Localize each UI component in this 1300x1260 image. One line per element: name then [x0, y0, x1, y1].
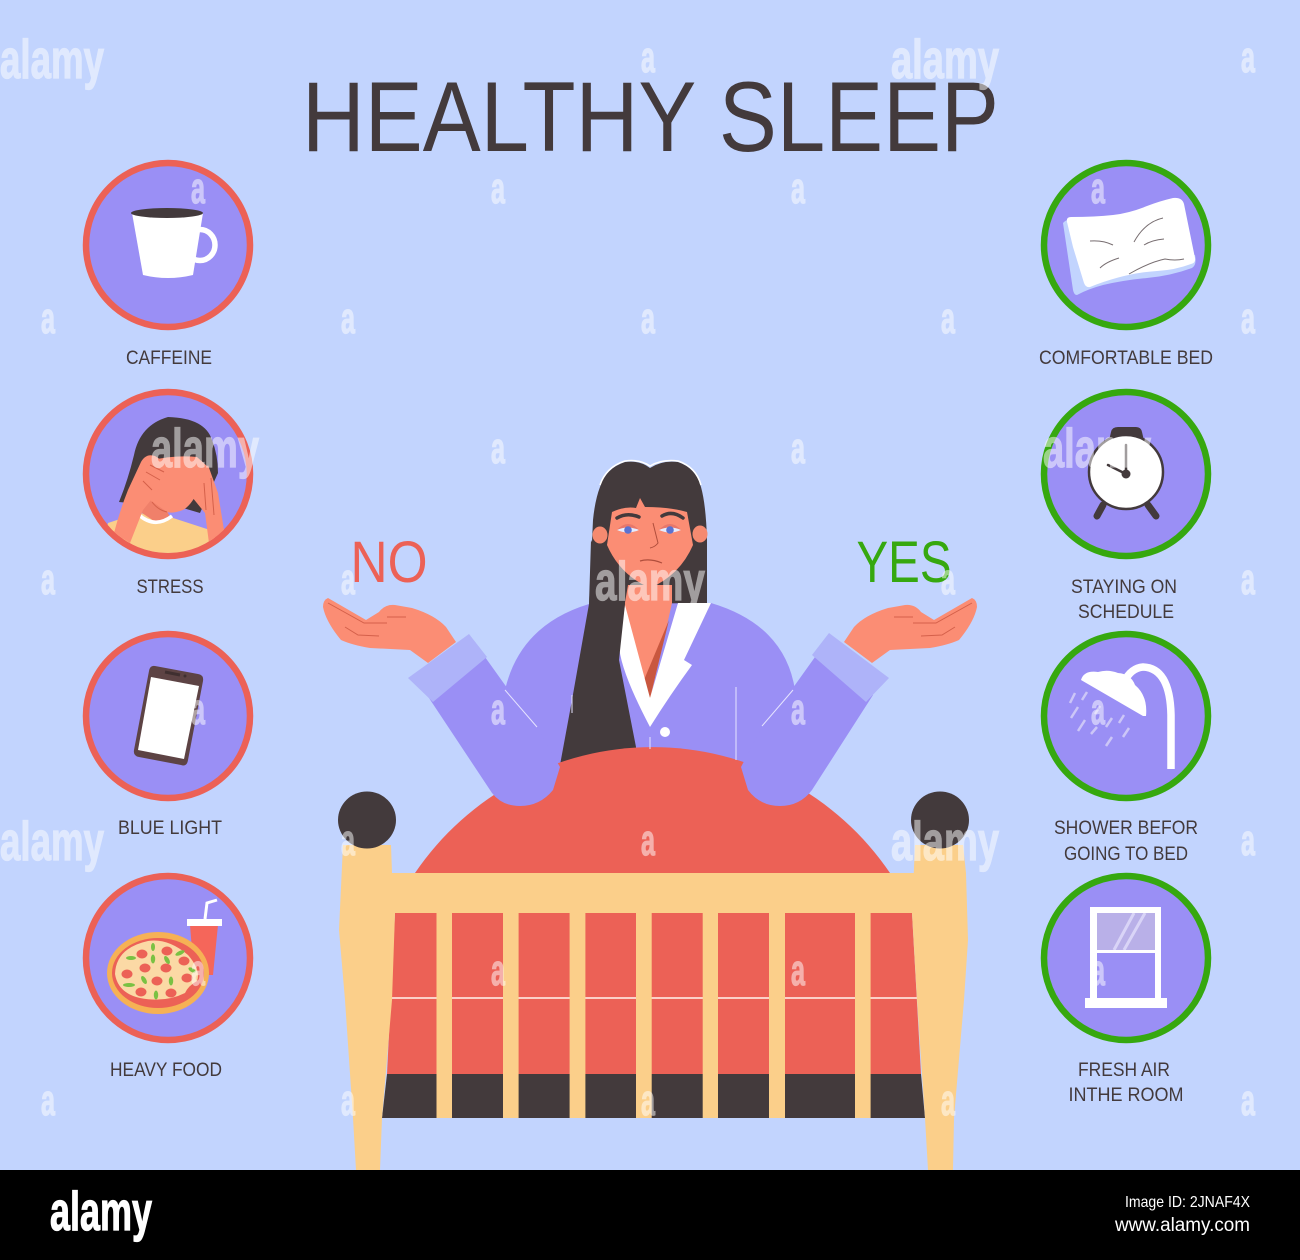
face [592, 498, 708, 588]
watermarks: a [1241, 816, 1255, 865]
watermarks: a [191, 685, 205, 734]
watermarks: a [641, 33, 655, 82]
label: shower before going to bed: GOING TO BED [1064, 844, 1188, 865]
label: shower before going to bed [1054, 818, 1198, 865]
watermarks: a [1241, 1076, 1255, 1125]
watermarks: a [1241, 294, 1255, 343]
watermarks: a [341, 294, 355, 343]
watermarks: a [791, 164, 805, 213]
watermarks: a [41, 294, 55, 343]
label: caffeine: CAFFEINE [126, 348, 212, 369]
icon: pillow [1044, 163, 1208, 327]
hair strand [560, 540, 636, 765]
label: staying on schedule: STAYING ON [1071, 577, 1177, 598]
left bed post [339, 845, 395, 1170]
icon: stressed woman [86, 392, 250, 560]
icon: shower [1044, 634, 1208, 798]
label: comfortable bed: COMFORTABLE BED [1039, 348, 1213, 369]
watermarks: a [1241, 555, 1255, 604]
label: staying on schedule [1071, 577, 1177, 623]
watermarks: alamy [0, 28, 104, 90]
label: blue light: BLUE LIGHT [118, 818, 222, 839]
watermarks: a [641, 816, 655, 865]
watermarks: a [491, 685, 505, 734]
watermarks: alamy [595, 550, 705, 612]
watermarks: a [941, 1076, 955, 1125]
watermarks: a [41, 1076, 55, 1125]
label: shower before going to bed: SHOWER BEFOR [1054, 818, 1198, 839]
icon: phone blue light [86, 634, 250, 798]
watermarks: a [791, 946, 805, 995]
watermarks: alamy [891, 28, 999, 90]
panel: no column [86, 163, 250, 1081]
jacket button [660, 727, 670, 737]
left hand and cuff [323, 598, 487, 702]
right arm [741, 650, 873, 806]
NO label: NO [350, 530, 428, 595]
icon: alarm clock [1044, 392, 1208, 556]
left arm [427, 650, 560, 806]
watermarks: a [191, 164, 205, 213]
icon: pizza and soda [86, 876, 250, 1040]
neck and chest [622, 585, 672, 700]
jacket collar [619, 603, 711, 727]
woman figure [323, 461, 977, 873]
right knob [911, 792, 969, 848]
watermarks: a [641, 294, 655, 343]
top rail [391, 873, 917, 913]
bottom black band [0, 1170, 1300, 1260]
YES label: YES [856, 530, 952, 595]
label: stress: STRESS [136, 577, 204, 598]
watermarks: a [1091, 164, 1105, 213]
watermarks: a [491, 946, 505, 995]
right hand and cuff [812, 598, 977, 702]
watermarks: a [641, 1076, 655, 1125]
blanket [415, 747, 890, 873]
slats [436, 913, 871, 1118]
watermarks: a [1241, 33, 1255, 82]
watermarks: a [791, 424, 805, 473]
label: heavy food: HEAVY FOOD [110, 1060, 222, 1081]
watermarks: a [941, 555, 955, 604]
label: staying on schedule: SCHEDULE [1078, 602, 1174, 623]
watermarks: a [341, 555, 355, 604]
bottom black band: www.alamy.com [1114, 1215, 1250, 1236]
label: fresh air in the room: INTHE ROOM [1068, 1085, 1184, 1106]
watermarks: alamy [151, 417, 259, 479]
watermarks: a [341, 816, 355, 865]
watermarks: a [491, 164, 505, 213]
watermarks: a [191, 946, 205, 995]
title: HEALTHY SLEEP [302, 61, 999, 172]
watermarks: a [41, 555, 55, 604]
bottom black band: alamy [50, 1180, 152, 1242]
watermarks: a [1091, 685, 1105, 734]
hair back [589, 462, 707, 606]
icon: caffeine cup [86, 163, 250, 327]
watermarks: a [791, 685, 805, 734]
jacket body [505, 603, 795, 790]
icon: window [1044, 876, 1208, 1040]
watermarks: alamy [891, 810, 999, 872]
watermarks: alamy [1043, 417, 1151, 479]
mattress dark base [382, 1074, 925, 1118]
watermarks: a [491, 424, 505, 473]
bottom black band: Image ID: 2JNAF4X [1125, 1194, 1250, 1211]
right bed post [912, 845, 968, 1170]
watermarks: alamy [0, 810, 104, 872]
left knob [338, 792, 396, 848]
label: fresh air in the room [1068, 1060, 1184, 1106]
watermarks: a [1091, 946, 1105, 995]
watermarks: a [941, 294, 955, 343]
watermarks: a [341, 1076, 355, 1125]
label: fresh air in the room: FRESH AIR [1078, 1060, 1170, 1081]
panel: yes column [1039, 163, 1213, 1106]
bed [338, 792, 969, 1170]
mattress red panel [387, 913, 921, 1074]
